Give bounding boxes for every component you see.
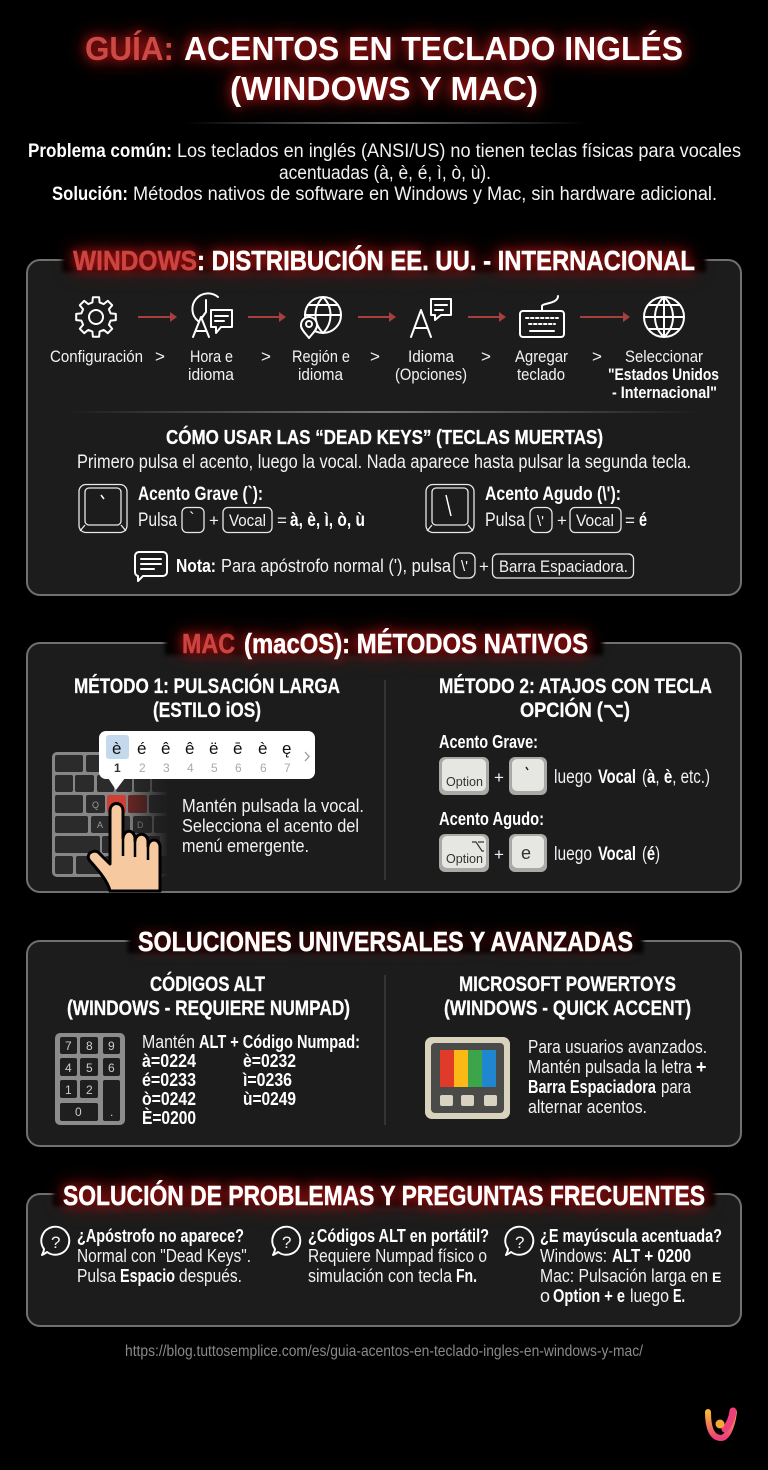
illustration: accent popup: é xyxy=(137,739,146,758)
steps text: > xyxy=(155,347,165,366)
steps text: "Estados Unidos xyxy=(608,365,719,384)
icon: globe xyxy=(644,297,684,337)
faq 1: Pulsa xyxy=(77,1266,117,1286)
alt codes list: ò=0242 xyxy=(142,1089,196,1109)
acute accent instructions: Acento Agudo (\'): xyxy=(485,484,621,505)
source url: https://blog.tuttosemplice.com/es/guia-acentos-en-teclado-ingles-en-windows-y-mac/ xyxy=(125,1343,643,1360)
illustration: accent popup: 1 xyxy=(114,761,121,775)
icon: numpad: 2 xyxy=(86,1083,93,1097)
icon: powertoys xyxy=(425,1037,510,1119)
acute accent instructions: + xyxy=(557,511,567,530)
illustration: accent popup: è xyxy=(258,739,267,758)
grave accent instructions xyxy=(79,484,365,532)
method 1 heading: MÉTODO 1: PULSACIÓN LARGA xyxy=(74,674,340,698)
icon: clock and language xyxy=(192,293,232,337)
alt codes list: Mantén xyxy=(142,1032,195,1052)
method 2: acute accent: Vocal xyxy=(598,844,636,865)
acute accent instructions xyxy=(426,484,647,532)
faq 3: ? xyxy=(515,1233,524,1252)
illustration: accent popup: 6 xyxy=(260,761,267,775)
grave accent instructions: Acento Grave (`): xyxy=(138,484,263,505)
method 1 text: Mantén pulsada la vocal. xyxy=(182,796,364,816)
intro text: acentuadas (à, è, é, ì, ò, ù). xyxy=(279,163,491,184)
icon: numpad: 6 xyxy=(108,1061,115,1075)
icon: numpad: 9 xyxy=(108,1039,115,1053)
alt codes list: à=0224 xyxy=(142,1051,196,1071)
faq 1: Espacio xyxy=(120,1266,175,1286)
faq 2: Fn. xyxy=(456,1266,477,1286)
faq 3: E xyxy=(712,1269,721,1285)
faq 3: Mac: Pulsación larga en xyxy=(540,1266,708,1286)
steps text: > xyxy=(592,347,602,366)
dead keys heading: CÓMO USAR LAS “DEAD KEYS” (TECLAS MUERTAS) xyxy=(166,425,603,449)
heading: mac: MAC xyxy=(182,628,235,659)
acute accent instructions: Vocal xyxy=(576,511,614,530)
steps text: idioma xyxy=(298,365,343,384)
title: GUÍA: xyxy=(85,30,174,67)
faq 2: ? xyxy=(282,1233,291,1252)
illustration: accent popup: ê xyxy=(185,739,194,758)
icon: numpad: 8 xyxy=(86,1039,93,1053)
alt codes list: ì=0236 xyxy=(242,1070,292,1090)
method 1 text xyxy=(182,796,364,856)
arrow xyxy=(138,312,177,322)
method 2: grave accent: Vocal xyxy=(598,767,636,788)
illustration: accent popup: ê xyxy=(161,739,170,758)
panel: mac xyxy=(27,625,741,892)
method 2: acute accent: luego xyxy=(554,844,592,865)
powertoys heading: (WINDOWS - QUICK ACCENT) xyxy=(444,997,691,1020)
illustration: accent popup: ë xyxy=(209,739,218,758)
powertoys heading xyxy=(444,973,691,1020)
method 2 heading: OPCIÓN (⌥) xyxy=(520,698,630,722)
method 2: grave accent: + xyxy=(494,768,504,787)
acute accent instructions: é xyxy=(639,510,647,531)
note: \' xyxy=(461,558,468,575)
method 2: grave accent: Acento Grave: xyxy=(439,732,538,752)
grave accent instructions: = xyxy=(277,511,287,530)
intro text: Métodos nativos de software en Windows y Mac, sin hardware adicional. xyxy=(133,184,717,205)
faq 1 xyxy=(41,1226,251,1286)
faq 3: ¿E mayúscula acentuada? xyxy=(540,1226,722,1246)
method 2 heading xyxy=(439,675,712,722)
note xyxy=(135,552,634,581)
panel: windows xyxy=(27,240,741,595)
icon: keyboard xyxy=(520,296,564,337)
method 1 text: Selecciona el acento del xyxy=(182,816,359,836)
faq 3: o xyxy=(540,1286,550,1306)
powertoys text: Mantén pulsada la letra xyxy=(528,1057,693,1077)
powertoys text xyxy=(528,1037,707,1117)
method 2: acute accent: e xyxy=(521,843,531,863)
alt codes list: è=0232 xyxy=(243,1051,296,1071)
alt codes list xyxy=(142,1032,360,1128)
heading: windows: : DISTRIBUCIÓN EE. UU. - INTERNACIONAL xyxy=(197,245,695,276)
illustration: accent popup xyxy=(99,731,315,790)
steps text: - Internacional" xyxy=(612,383,717,402)
icon: numpad: . xyxy=(110,1105,113,1119)
illustration: accent popup: 7 xyxy=(284,761,291,775)
alt codes heading: CÓDIGOS ALT xyxy=(150,972,265,996)
steps text: Configuración xyxy=(50,347,143,366)
grave accent instructions: à, è, ì, ò, ù xyxy=(290,510,365,531)
icon: numpad xyxy=(55,1033,125,1125)
icon: note bubble xyxy=(135,552,167,581)
faq 3: luego xyxy=(630,1286,669,1306)
icon: numpad: 0 xyxy=(75,1105,82,1119)
grave accent instructions: Vocal xyxy=(229,511,266,530)
title: ACENTOS EN TECLADO INGLÉS xyxy=(184,30,683,67)
intro text: Solución: xyxy=(52,184,128,205)
alt codes heading: (WINDOWS - REQUIERE NUMPAD) xyxy=(67,997,350,1020)
illustration: accent popup: 4 xyxy=(187,761,194,775)
alt codes list: È=0200 xyxy=(142,1107,196,1128)
powertoys text: para xyxy=(661,1077,692,1097)
powertoys text: Barra Espaciadora xyxy=(528,1077,657,1097)
faq 3: E. xyxy=(673,1286,685,1306)
intro text: Problema común: xyxy=(28,141,172,162)
faq 1: Normal con "Dead Keys". xyxy=(77,1246,251,1266)
method 2: acute accent: Option xyxy=(446,851,483,866)
faq 3: ALT + 0200 xyxy=(612,1246,691,1266)
steps text: > xyxy=(370,347,380,366)
grave accent instructions: + xyxy=(209,511,219,530)
alt codes list: ù=0249 xyxy=(243,1089,296,1109)
method 2 heading: MÉTODO 2: ATAJOS CON TECLA xyxy=(439,675,712,698)
illustration: accent popup: 2 xyxy=(139,761,146,775)
title: (WINDOWS Y MAC) xyxy=(230,70,538,107)
arrow xyxy=(580,312,630,322)
illustration: accent popup: è xyxy=(112,739,121,758)
faq 2 xyxy=(272,1226,489,1286)
note: + xyxy=(479,557,489,576)
note: Para apóstrofo normal ('), pulsa xyxy=(221,556,452,576)
grave accent instructions: ` xyxy=(189,509,195,528)
faq 2: Requiere Numpad físico o xyxy=(308,1246,487,1266)
method 2: acute accent: + xyxy=(494,845,504,864)
method 2: grave accent: (à, è, etc.) xyxy=(642,767,710,788)
steps text: idioma xyxy=(188,365,234,384)
illustration: accent popup: 3 xyxy=(163,761,170,775)
illustration: accent popup: ē xyxy=(233,739,242,758)
method 2: acute accent: Acento Agudo: xyxy=(439,809,544,829)
alt codes list: é=0233 xyxy=(142,1070,196,1090)
note: Barra Espaciadora. xyxy=(499,557,628,576)
faq 3: Option + e xyxy=(553,1286,625,1306)
faq 3: Windows: xyxy=(540,1246,607,1266)
illustration: hand xyxy=(88,804,160,891)
powertoys text: alternar acentos. xyxy=(528,1097,647,1117)
icon: globe and pin xyxy=(301,297,341,338)
method 2: acute accent xyxy=(439,809,660,872)
illustration: keyboard xyxy=(52,750,169,879)
icon: gear xyxy=(76,297,116,337)
illustration: keyboard: Q xyxy=(92,800,99,810)
logo xyxy=(708,1411,734,1438)
heading: windows: WINDOWS xyxy=(73,245,197,276)
faq 2: ¿Códigos ALT en portátil? xyxy=(308,1226,489,1246)
illustration: accent popup: ę xyxy=(282,739,291,758)
powertoys heading: MICROSOFT POWERTOYS xyxy=(459,973,676,996)
grave accent instructions: Pulsa xyxy=(138,510,177,531)
acute accent instructions: \' xyxy=(537,513,544,530)
method 1 text: menú emergente. xyxy=(182,836,309,856)
steps text: Agregar xyxy=(515,347,568,366)
steps text: > xyxy=(261,347,271,366)
method 1 heading: (ESTILO iOS) xyxy=(153,699,261,722)
panel: troubleshooting xyxy=(27,1176,741,1326)
panel: universal solutions xyxy=(27,923,741,1146)
steps text: Seleccionar xyxy=(625,347,703,366)
steps text: > xyxy=(481,347,491,366)
icon: numpad: 4 xyxy=(65,1061,72,1075)
method 2: acute accent: (é) xyxy=(642,844,660,865)
faq 1: después. xyxy=(179,1266,242,1286)
arrow xyxy=(248,312,286,322)
method 1 heading xyxy=(74,674,340,722)
method 2: grave accent xyxy=(439,732,710,795)
heading: universal solutions: SOLUCIONES UNIVERSALES Y AVANZADAS xyxy=(138,926,633,957)
faq 3 xyxy=(505,1226,722,1306)
illustration: keyboard: D xyxy=(137,820,144,830)
icon: numpad: 1 xyxy=(65,1083,72,1097)
faq 1: ¿Apóstrofo no aparece? xyxy=(77,1226,244,1246)
steps text: (Opciones) xyxy=(395,365,467,384)
acute accent instructions: = xyxy=(625,511,635,530)
illustration: keyboard: A xyxy=(97,820,103,830)
alt codes list: ALT + Código Numpad: xyxy=(199,1032,360,1052)
arrow xyxy=(468,312,506,322)
arrow xyxy=(358,312,396,322)
steps text: Región e xyxy=(292,347,350,366)
steps text: Hora e xyxy=(190,347,233,366)
icon: numpad: 7 xyxy=(65,1039,72,1053)
intro text: Los teclados en inglés (ANSI/US) no tienen teclas físicas para vocales xyxy=(177,141,741,162)
intro text xyxy=(28,141,741,205)
method 2: grave accent: Option xyxy=(446,774,483,789)
icon: numpad: 5 xyxy=(86,1061,93,1075)
steps text xyxy=(50,347,719,402)
powertoys text: Para usuarios avanzados. xyxy=(528,1037,707,1057)
illustration: accent popup: 6 xyxy=(235,761,242,775)
illustration: accent popup: 5 xyxy=(211,761,218,775)
acute accent instructions: Pulsa xyxy=(485,510,525,531)
heading: mac: (macOS): MÉTODOS NATIVOS xyxy=(244,628,588,659)
steps text: Idioma xyxy=(408,347,454,366)
title xyxy=(85,30,683,107)
powertoys text: + xyxy=(696,1057,707,1077)
icon: language bubble xyxy=(411,299,451,337)
steps text: teclado xyxy=(517,365,565,384)
faq 2: simulación con tecla xyxy=(308,1266,453,1286)
alt codes heading xyxy=(67,972,350,1020)
note: Nota: xyxy=(176,556,216,576)
faq 1: ? xyxy=(51,1233,60,1252)
method 2: grave accent: luego xyxy=(554,767,592,788)
